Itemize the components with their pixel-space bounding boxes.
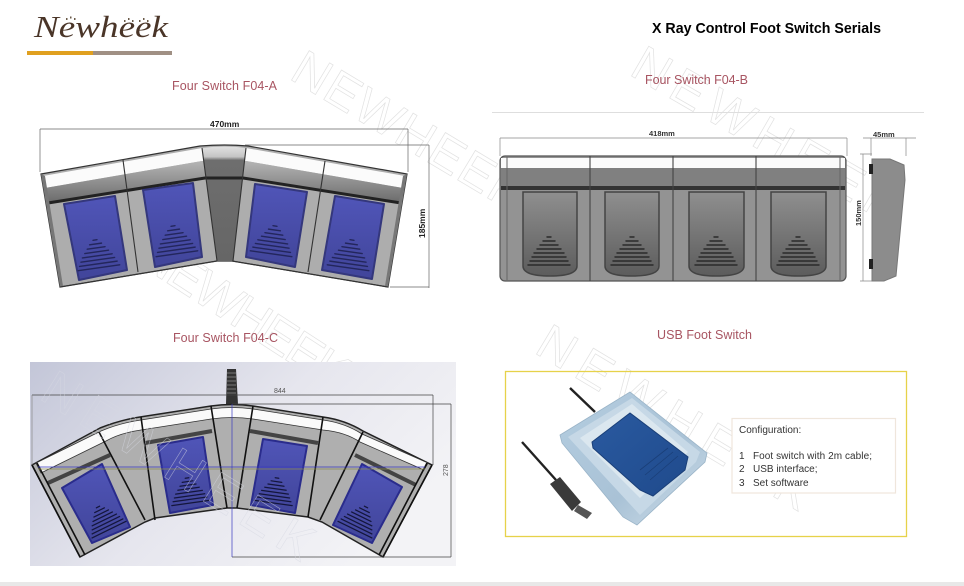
diagram: foot switch F04-C xyxy=(30,362,456,566)
diagram: foot switch F04-B front xyxy=(500,129,847,281)
heading: Four Switch F04-A: Four Switch F04-A xyxy=(172,79,278,93)
dimensions F04-B xyxy=(500,129,847,156)
logo xyxy=(27,9,172,55)
body F04-C xyxy=(32,404,432,557)
dimensions side view: 150mm xyxy=(854,200,863,226)
configuration text box: Configuration: xyxy=(739,425,801,436)
diagram: foot switch F04-A xyxy=(40,119,429,288)
configuration text box: 3 xyxy=(739,478,745,489)
pedals F04-A xyxy=(64,183,384,280)
pedals F04-B xyxy=(523,192,826,276)
watermarks: NEWHEEK xyxy=(129,224,361,402)
dimensions F04-C: 844 xyxy=(274,388,286,395)
cable F04-C xyxy=(226,369,238,404)
watermarks: NEWHEEK xyxy=(622,35,910,234)
pedals F04-C xyxy=(62,437,402,543)
body F04-A xyxy=(41,145,407,287)
configuration text box: USB interface; xyxy=(753,464,817,475)
logo: Newheek xyxy=(33,9,169,44)
configuration text box: 1 xyxy=(739,451,745,462)
panel frame xyxy=(506,372,906,536)
heading: Four Switch F04-B: Four Switch F04-B xyxy=(645,73,748,87)
dimensions F04-A: 470mm xyxy=(210,119,240,129)
product photo: USB foot switch xyxy=(522,388,707,525)
background panel F04-C xyxy=(30,362,456,566)
bottom band xyxy=(0,582,964,586)
watermark over panel F04-C: NEWHEEK xyxy=(32,360,325,572)
title: X Ray Control Foot Switch Serials xyxy=(652,20,881,37)
dimensions side view xyxy=(854,130,916,281)
configuration text box: Foot switch with 2m cable; xyxy=(753,451,872,462)
heading: USB Foot Switch: USB Foot Switch xyxy=(657,328,752,342)
configuration text box: 2 xyxy=(739,464,745,475)
watermarks: NEWHEEK xyxy=(527,313,822,521)
dimensions F04-C: 278 xyxy=(443,464,450,476)
watermarks xyxy=(129,35,910,521)
dimensions F04-C xyxy=(32,388,451,557)
body F04-B xyxy=(500,156,846,281)
watermarks: NEWHEEK xyxy=(282,39,536,222)
dimensions F04-B: 418mm xyxy=(649,129,675,138)
dimensions F04-A: 185mm xyxy=(417,208,427,238)
heading: Four Switch F04-C: Four Switch F04-C xyxy=(173,331,278,345)
dimensions side view: 45mm xyxy=(873,130,895,139)
configuration text box xyxy=(732,418,896,493)
divider line under F04-B heading xyxy=(492,112,924,113)
panel: USB foot switch xyxy=(506,372,906,536)
configuration text box: Set software xyxy=(753,478,809,489)
dimensions F04-A xyxy=(40,119,429,288)
diagram: foot switch F04-B side xyxy=(854,130,916,281)
